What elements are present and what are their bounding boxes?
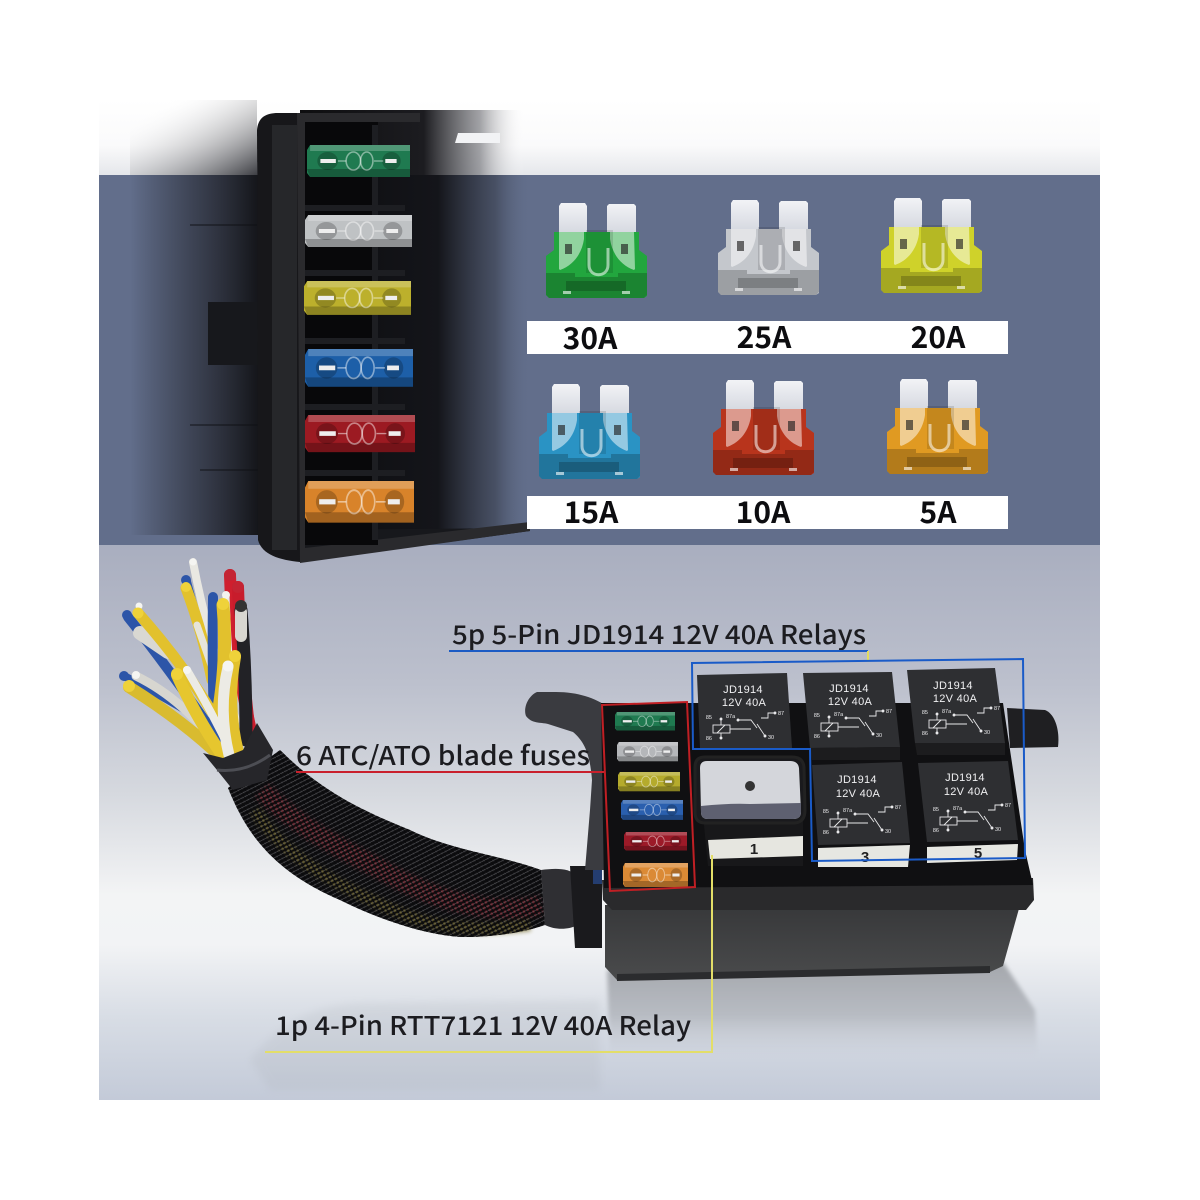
label strip top: 30A bbox=[563, 314, 618, 358]
fuse 15A bbox=[539, 384, 640, 479]
top plate bbox=[601, 703, 1033, 888]
fuse rating cards bbox=[527, 198, 1008, 532]
braided sleeve bbox=[228, 750, 545, 937]
rim bbox=[602, 878, 1034, 910]
relay 6 bottom-right: 12V 40A bbox=[944, 786, 989, 798]
callout: relays bbox=[449, 615, 1025, 861]
mounting ear right bbox=[1007, 708, 1058, 748]
wire ends bbox=[119, 558, 247, 692]
fuse 10A bbox=[713, 380, 814, 475]
small relay 1: 1 bbox=[750, 841, 758, 858]
label strip top bbox=[527, 313, 1008, 358]
relay 4 top-right: 12V 40A bbox=[933, 693, 978, 705]
relay 2 top-left: JD1914 bbox=[723, 684, 763, 696]
fuse 25A bbox=[718, 200, 819, 295]
callout: single relay bbox=[265, 855, 712, 1052]
callout: blade fuses: 6 ATC/ATO blade fuses bbox=[296, 736, 590, 773]
label strip top: 20A bbox=[911, 313, 966, 357]
callout: blade fuses bbox=[296, 702, 695, 891]
relay 6 bottom-right: JD1914 bbox=[945, 772, 985, 784]
callout: single relay: 1p 4-Pin RTT7121 12V 40A Relay bbox=[275, 1006, 691, 1043]
side fuses: 30A to 5A bbox=[304, 145, 415, 523]
label strip bottom: 5A bbox=[920, 488, 957, 532]
mounting ear left bbox=[525, 692, 608, 870]
reflection under box bbox=[607, 962, 1038, 1060]
relay 2 top-left: 12V 40A bbox=[722, 697, 767, 709]
body lower bbox=[605, 905, 1020, 980]
fuse 30A bbox=[546, 203, 647, 298]
box right interior bbox=[300, 110, 530, 562]
background: lower panel bbox=[99, 545, 1100, 1100]
relay 4 top-right: JD1914 bbox=[933, 680, 973, 692]
label strip top: 25A bbox=[737, 313, 792, 357]
relay 3 top-middle: JD1914 bbox=[829, 683, 869, 695]
loose wires bbox=[124, 562, 252, 760]
relay 5 bottom-middle: 12V 40A bbox=[836, 788, 881, 800]
relay 5 bottom-middle: JD1914 bbox=[837, 774, 877, 786]
label strip bottom bbox=[527, 488, 1008, 532]
relay 6 bottom-right: 5 bbox=[974, 845, 982, 862]
background: top fade bbox=[99, 100, 1100, 176]
cable harness bbox=[119, 558, 602, 948]
relay 4 top-right bbox=[907, 668, 1005, 755]
small relay 1 bbox=[695, 757, 805, 866]
fuse box close-up bbox=[130, 100, 530, 563]
label strip bottom: 15A bbox=[564, 488, 619, 532]
fuse relay box bbox=[525, 668, 1058, 981]
tape at box end bbox=[541, 869, 578, 929]
fuse 20A bbox=[881, 198, 982, 293]
slots bbox=[305, 125, 405, 540]
box frame bbox=[257, 113, 300, 562]
background: fuse panel bbox=[99, 175, 1100, 546]
relay 3 top-middle bbox=[803, 672, 900, 760]
callout: relays: 5p 5-Pin JD1914 12V 40A Relays bbox=[452, 615, 866, 652]
fuse 5A bbox=[887, 379, 988, 474]
relay 6 bottom-right bbox=[918, 761, 1018, 863]
relay 5 bottom-middle: 3 bbox=[861, 849, 869, 866]
small blade fuses bbox=[615, 712, 688, 887]
label strip bottom: 10A bbox=[736, 488, 791, 532]
relay 2 top-left bbox=[697, 673, 792, 748]
box left side shading bbox=[130, 100, 260, 535]
tape collar bbox=[203, 723, 273, 790]
relay 3 top-middle: 12V 40A bbox=[828, 696, 873, 708]
relay 5 bottom-middle bbox=[812, 762, 910, 867]
